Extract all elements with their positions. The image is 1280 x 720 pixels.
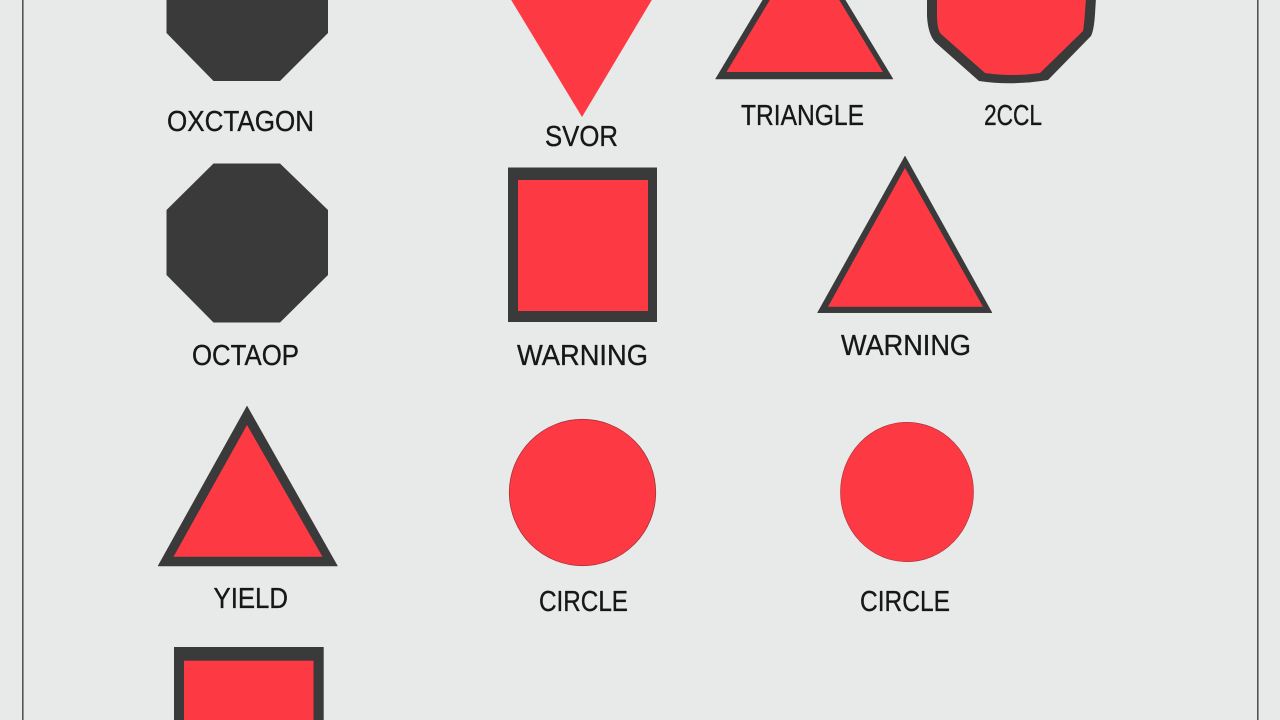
- frame: right border: [1257, 0, 1259, 720]
- sign: top octagon: [166, 0, 328, 138]
- label: WARNING: WARNING: [841, 330, 971, 362]
- sign: first circle: [509, 419, 656, 618]
- icon: outlined square: [174, 647, 324, 720]
- sign: bottom square: [174, 647, 324, 720]
- icon: dark octagon: [166, 164, 328, 322]
- sign: red octagon: [927, 0, 1096, 132]
- label: SVOR: SVOR: [545, 121, 618, 153]
- label: CIRCLE: CIRCLE: [860, 586, 950, 618]
- icon: square red fill: [184, 661, 314, 720]
- label: YIELD: YIELD: [214, 583, 288, 615]
- sign: warning square: [508, 168, 657, 372]
- label: 2CCL: 2CCL: [984, 100, 1042, 132]
- frame: left border: [22, 0, 24, 720]
- icon: outlined rounded octagon: [927, 0, 1096, 83]
- icon: outlined triangle: [158, 406, 338, 566]
- icon: red circle: [509, 419, 656, 566]
- label: WARNING: WARNING: [517, 340, 648, 372]
- sign: second circle: [840, 422, 974, 618]
- icon: dark octagon: [166, 0, 328, 81]
- icon: outlined square: [508, 168, 657, 322]
- sign: inverted red triangle: [510, 0, 653, 153]
- label: OCTAOP: OCTAOP: [192, 340, 299, 372]
- label: OXCTAGON: OXCTAGON: [167, 106, 314, 138]
- icon: red circle: [840, 422, 974, 562]
- icon: inverted triangle: [510, 0, 653, 117]
- sign: yield triangle: [158, 406, 338, 615]
- label: CIRCLE: CIRCLE: [539, 586, 628, 618]
- icon: outlined triangle: [818, 156, 992, 313]
- icon: outlined triangle: [716, 0, 893, 79]
- label: TRIANGLE: TRIANGLE: [741, 100, 864, 132]
- sign: second octagon: [166, 164, 328, 372]
- sign: top triangle: [716, 0, 893, 132]
- sign: warning triangle: [818, 156, 992, 362]
